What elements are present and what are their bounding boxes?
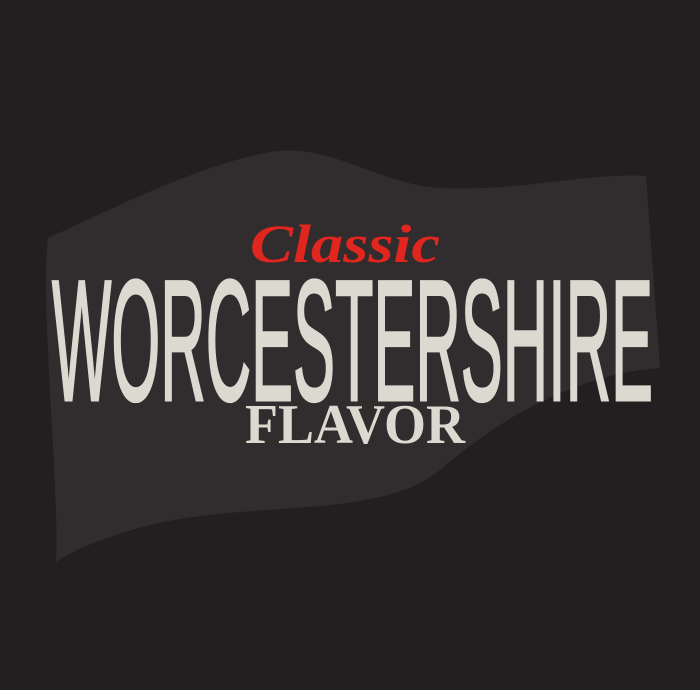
heading: FLAVOR: FLAVOR bbox=[245, 394, 466, 456]
heading: Classic: Classic bbox=[250, 214, 440, 274]
waving flag shape bbox=[46, 150, 660, 562]
